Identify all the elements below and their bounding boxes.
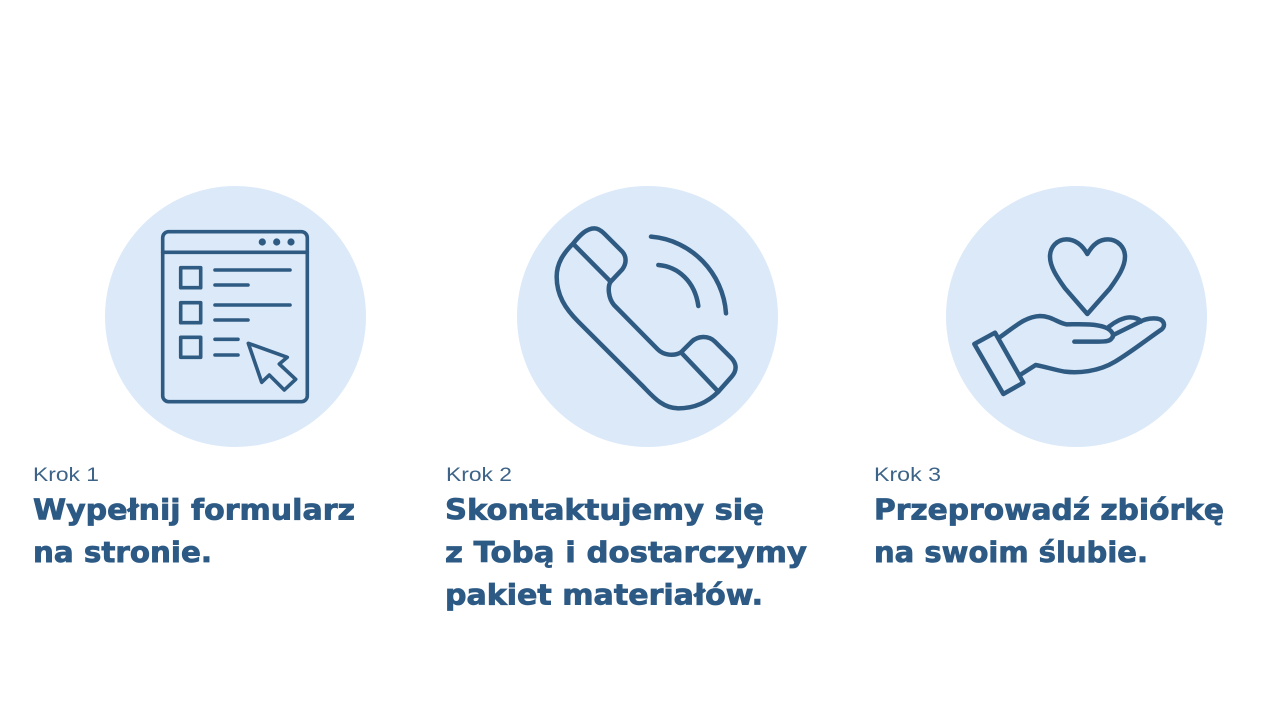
- step 1 circle: [105, 186, 366, 447]
- step 3 circle: [946, 186, 1207, 447]
- step 1 heading: Wypełnij formularz: [33, 494, 355, 526]
- panel: step 2: [445, 186, 807, 612]
- step 2 heading: pakiet materiałów.: [445, 578, 763, 612]
- icon: heart over open hand: [974, 239, 1164, 394]
- step 1 label: Krok 1: [33, 465, 99, 486]
- step 2 heading: z Tobą i dostarczymy: [445, 536, 807, 569]
- icon: web form with cursor: [163, 232, 307, 402]
- step 1 heading: na stronie.: [33, 536, 212, 569]
- step 2 label: Krok 2: [446, 465, 512, 486]
- panel: step 1: [33, 186, 366, 569]
- step 2 heading: Skontaktujemy się: [445, 494, 764, 526]
- step 2 heading: [445, 494, 807, 612]
- step 3 heading: Przeprowadź zbiórkę: [874, 494, 1224, 526]
- step 3 label: Krok 3: [874, 465, 941, 486]
- step 3 heading: na swoim ślubie.: [874, 536, 1148, 569]
- icon: telephone handset: [557, 228, 736, 408]
- step 2 circle: [517, 186, 778, 447]
- step 1 heading: [33, 494, 355, 569]
- step 3 heading: [874, 494, 1224, 569]
- panel: step 3: [874, 186, 1224, 569]
